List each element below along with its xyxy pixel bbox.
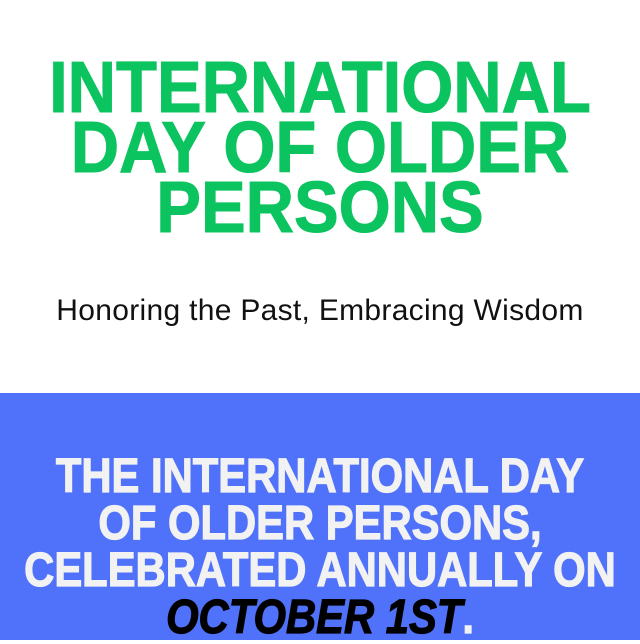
title: PERSONS (156, 168, 484, 248)
info text: THE INTERNATIONAL DAY (56, 450, 584, 503)
info text: OF OLDER PERSONS, (98, 497, 542, 550)
panel: blue info (0, 393, 640, 640)
info text: CELEBRATED ANNUALLY ON (24, 544, 616, 597)
title (49, 48, 591, 248)
info text: OCTOBER 1ST. (166, 591, 474, 644)
subtitle: Honoring the Past, Embracing Wisdom (56, 294, 584, 327)
info text (24, 450, 616, 644)
title: DAY OF OLDER (71, 108, 569, 188)
title: INTERNATIONAL (49, 48, 591, 128)
